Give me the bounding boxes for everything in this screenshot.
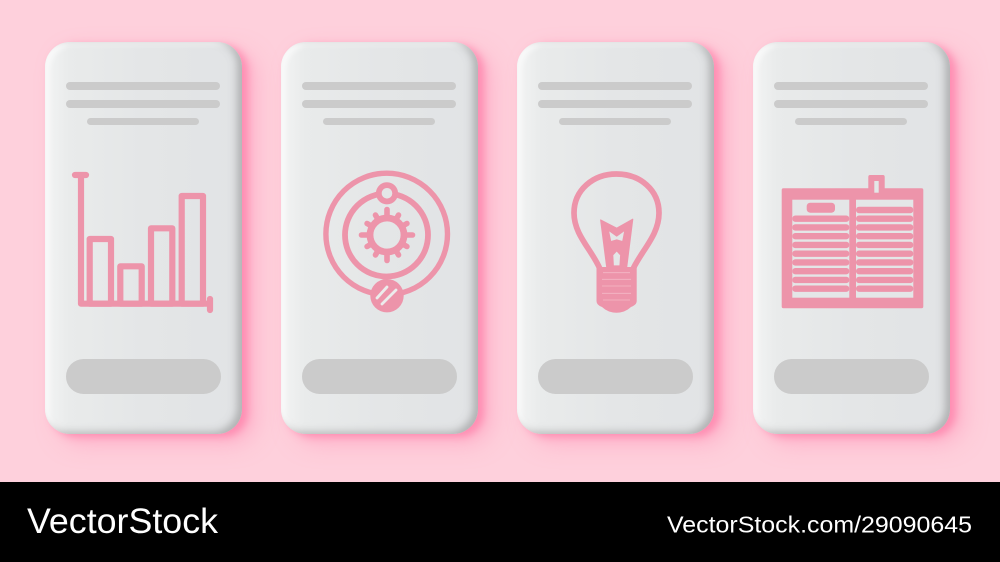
image id text: VectorStock.com/29090645 bbox=[667, 512, 972, 538]
text placeholder line 1 bbox=[774, 82, 928, 90]
button placeholder bbox=[538, 359, 693, 394]
text placeholder line 2 bbox=[302, 100, 456, 108]
panel: card 4 open book bbox=[753, 42, 950, 434]
text placeholder line 3 bbox=[795, 118, 907, 125]
icon: light bulb bbox=[571, 171, 662, 313]
footer bar bbox=[0, 482, 1000, 562]
panel: card 2 solar system bbox=[281, 42, 478, 434]
text placeholder line 1 bbox=[66, 82, 220, 90]
text placeholder line 2 bbox=[538, 100, 692, 108]
text placeholder line 3 bbox=[559, 118, 671, 125]
text placeholder line 2 bbox=[66, 100, 220, 108]
button placeholder bbox=[66, 359, 221, 394]
icon: solar system bbox=[323, 170, 450, 312]
icon: open book bbox=[782, 175, 924, 308]
text placeholder line 1 bbox=[538, 82, 692, 90]
logo text: VectorStock bbox=[27, 502, 219, 541]
panel: card 3 light bulb bbox=[517, 42, 714, 434]
text placeholder line 3 bbox=[323, 118, 435, 125]
icon: bar chart bbox=[72, 172, 214, 314]
text placeholder line 1 bbox=[302, 82, 456, 90]
text placeholder line 3 bbox=[87, 118, 199, 125]
button placeholder bbox=[774, 359, 929, 394]
panel: card 1 bar chart bbox=[45, 42, 242, 434]
text placeholder line 2 bbox=[774, 100, 928, 108]
button placeholder bbox=[302, 359, 457, 394]
